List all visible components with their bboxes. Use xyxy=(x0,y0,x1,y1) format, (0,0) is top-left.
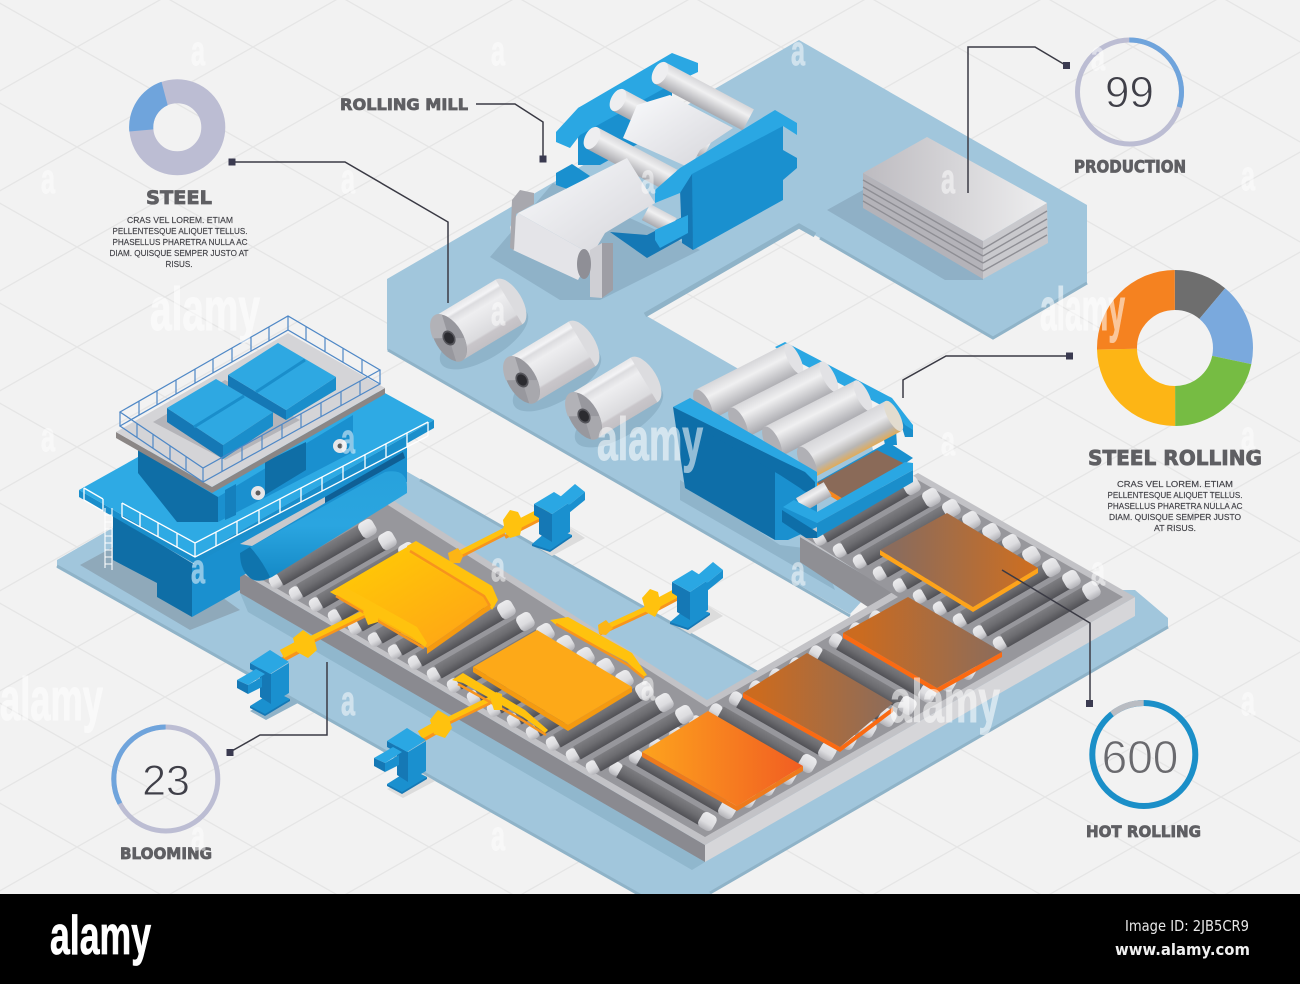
roof box pair left xyxy=(167,379,273,459)
pusher arm: bottom left on second plate xyxy=(420,673,548,741)
footer bar: alamy xyxy=(50,904,151,966)
heading: rolling mill: ROLLING MILL xyxy=(340,95,468,114)
roof railing xyxy=(120,316,380,482)
text block: steel: PHASELLUS PHARETRA NULLA AC xyxy=(112,237,248,247)
conveyor rollers: second section xyxy=(606,607,979,833)
leader: production xyxy=(968,47,1070,193)
watermarks: a xyxy=(341,155,355,202)
watermarks: a xyxy=(341,677,355,724)
watermarks: a xyxy=(1241,677,1255,724)
watermarks: a xyxy=(1241,412,1255,459)
watermarks: alamy xyxy=(597,406,703,473)
floor: lower platform xyxy=(57,415,1168,895)
watermarks: a xyxy=(941,155,955,202)
top roller xyxy=(648,59,754,131)
watermarks: a xyxy=(641,155,655,202)
front lower rail xyxy=(782,462,913,538)
gearbox unit 2 xyxy=(670,562,723,634)
output roll face xyxy=(510,213,592,280)
watermarks: a xyxy=(191,27,205,74)
text block: steel xyxy=(110,215,249,269)
watermarks: a xyxy=(41,413,55,460)
ring gauge: 600: 600 xyxy=(1102,731,1178,783)
main deck xyxy=(79,392,434,564)
watermarks: a xyxy=(1091,32,1105,79)
watermarks: a xyxy=(491,812,505,859)
watermarks: a xyxy=(641,662,655,709)
watermarks: a xyxy=(191,545,205,592)
footer bar: www.alamy.com xyxy=(1115,940,1250,959)
leader: hot rolling xyxy=(1002,570,1093,707)
aluminium coils xyxy=(423,272,669,446)
output sheet xyxy=(518,158,655,255)
conveyor rollers: first section xyxy=(266,517,696,778)
rear rail xyxy=(775,342,913,445)
blooming building xyxy=(79,316,434,617)
leader: blooming xyxy=(226,662,327,756)
left wall xyxy=(673,407,780,540)
leader: rolling mill xyxy=(476,104,546,162)
watermarks: a xyxy=(1241,152,1255,199)
text block: steel: CRAS VEL LOREM. ETIAM xyxy=(127,215,233,225)
lower frame xyxy=(610,212,692,258)
gearbox unit 4 xyxy=(374,728,435,798)
plate 5: cooling xyxy=(843,597,1002,693)
watermarks: a xyxy=(341,415,355,462)
text block: steel: PELLENTESQUE ALIQUET TELLUS. xyxy=(112,226,248,236)
middle roller xyxy=(580,124,677,191)
roller 1 xyxy=(689,341,807,423)
front rail xyxy=(673,398,817,494)
side panel xyxy=(775,460,817,540)
watermarks: a xyxy=(941,417,955,464)
half cylinder xyxy=(240,452,407,581)
plate 2: amber xyxy=(473,630,632,731)
text block: steel rolling: PHASELLUS PHARETRA NULLA AC xyxy=(1108,501,1242,511)
floor: upper platform xyxy=(387,40,1087,616)
upper sheet xyxy=(623,95,733,168)
watermarks: a xyxy=(191,812,205,859)
upper block right face xyxy=(218,415,353,522)
roller 2 xyxy=(724,359,842,441)
watermarks: a xyxy=(1091,547,1105,594)
hot sheet in rollers xyxy=(817,450,907,505)
heading: steel rolling: STEEL ROLLING xyxy=(1088,446,1262,470)
lower roller xyxy=(642,204,677,234)
plate 1: yellow with curved guides xyxy=(330,547,495,654)
donut chart: steel xyxy=(129,82,213,163)
plate 3: orange xyxy=(642,711,803,811)
deck railing xyxy=(84,422,428,557)
watermarks: a xyxy=(791,547,805,594)
footer bar xyxy=(0,894,1300,984)
ring gauge: 99: 99 xyxy=(1105,68,1154,117)
pusher arm: top right on first plate xyxy=(407,509,548,610)
pusher arm: bottom left on first plate xyxy=(282,587,427,660)
watermarks: a xyxy=(491,287,505,334)
footer bar: Image ID: 2JB5CR9 xyxy=(1125,917,1249,935)
roof box pair right xyxy=(228,343,336,420)
ring gauge: 99 xyxy=(1078,40,1182,144)
donut chart: steel rolling xyxy=(1117,290,1233,406)
leader: steel xyxy=(228,158,448,303)
rolling mill machine xyxy=(510,53,797,298)
ring gauge: 23 xyxy=(114,727,218,831)
watermarks: a xyxy=(791,27,805,74)
steel rolling machine xyxy=(673,341,913,540)
ring gauge: 23: 23 xyxy=(142,757,190,805)
text block: steel rolling: PELLENTESQUE ALIQUET TELLUS. xyxy=(1108,490,1242,500)
text block: steel rolling: CRAS VEL LOREM. ETIAM xyxy=(1117,479,1233,489)
watermarks: alamy xyxy=(1040,276,1125,343)
watermarks: alamy xyxy=(890,668,1000,735)
watermarks: a xyxy=(491,27,505,74)
front frame xyxy=(655,110,797,250)
text block: steel: RISUS. xyxy=(166,259,192,269)
heading: steel: STEEL xyxy=(146,187,212,209)
plate 6: cooling xyxy=(880,513,1038,612)
text block: steel rolling: DIAM. QUISQUE SEMPER JUSTO xyxy=(1109,512,1241,522)
watermarks: a xyxy=(491,543,505,590)
roller bay back xyxy=(817,442,913,505)
text block: steel: DIAM. QUISQUE SEMPER JUSTO AT xyxy=(110,248,249,258)
ring gauge: 600 xyxy=(1092,703,1195,806)
back frame xyxy=(556,53,698,190)
roller 4 xyxy=(793,398,907,480)
watermarks: alamy xyxy=(0,666,103,733)
rear stand xyxy=(510,190,534,250)
front stand xyxy=(590,243,613,298)
gearbox unit 3 xyxy=(237,650,298,720)
upper block left face xyxy=(138,450,218,522)
valve discs xyxy=(251,439,347,500)
roof slab xyxy=(116,333,385,493)
lower right wall xyxy=(192,442,407,617)
roller 3 xyxy=(758,378,876,460)
upper pass roller xyxy=(606,86,714,158)
conveyor frame xyxy=(240,473,1135,862)
plate 4: cooling xyxy=(743,653,893,752)
text block: steel rolling: AT RISUS. xyxy=(1154,523,1196,533)
ladder xyxy=(105,508,112,570)
watermarks: a xyxy=(41,155,55,202)
leader: steel rolling xyxy=(903,352,1073,398)
lower roller xyxy=(796,482,832,512)
gearbox unit 1 xyxy=(532,484,585,556)
roll end xyxy=(577,249,591,279)
heading: production: PRODUCTION xyxy=(1074,158,1186,176)
stack of steel sheets xyxy=(863,137,1048,279)
text block: steel rolling xyxy=(1108,479,1242,533)
conveyor rollers: third section xyxy=(810,474,1103,654)
watermarks: alamy xyxy=(150,276,260,343)
pusher arm: top right on second plate xyxy=(550,589,682,678)
heading: blooming: BLOOMING xyxy=(120,844,212,863)
lower left wall xyxy=(113,515,195,617)
heading: hot rolling: HOT ROLLING xyxy=(1086,822,1201,841)
